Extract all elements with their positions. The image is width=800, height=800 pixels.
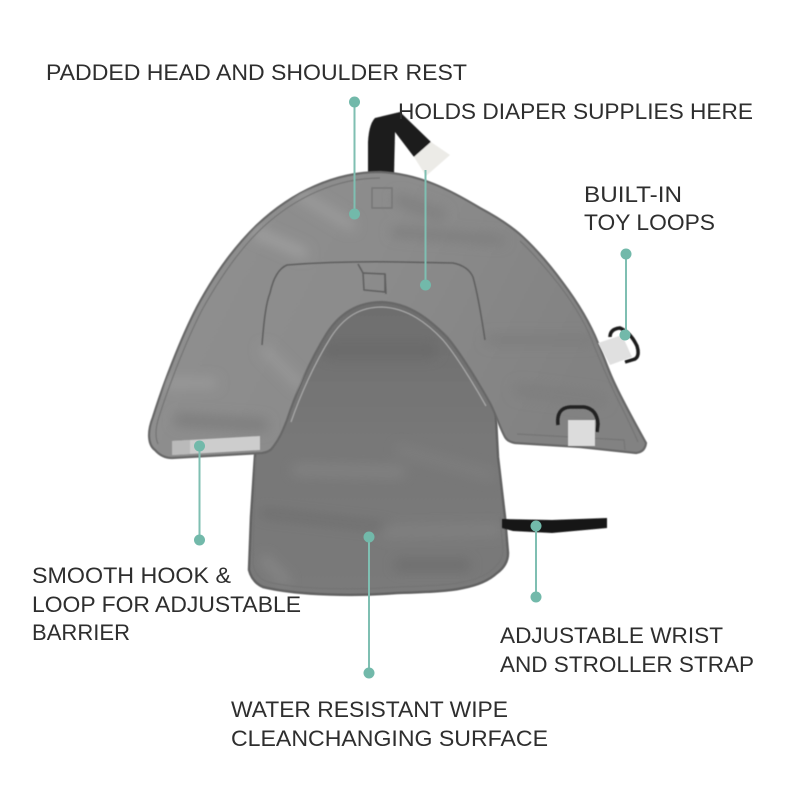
callout line: diaper supplies [420,170,431,290]
callout line: hook and loop [194,440,205,546]
lower pad [249,280,508,595]
label: adjustable wrist and stroller strap: ADJUSTABLE WRIST [500,623,723,648]
stitched compartment [262,188,485,345]
label: holds diaper supplies here: HOLDS DIAPER SUPPLIES HERE [398,99,753,124]
callout line: wrist strap [530,520,542,602]
label: smooth hook and loop: LOOP FOR ADJUSTABLE [32,592,301,617]
icon: diaper mat [149,112,646,595]
pad fabric folds [277,571,278,572]
label: water resistant wipe clean changing surface: WATER RESISTANT WIPE [231,697,508,722]
label: smooth hook and loop: BARRIER [32,620,130,645]
toy loop upper [598,328,638,365]
wrist strap [502,518,607,533]
label: water resistant wipe clean changing surface: CLEANCHANGING SURFACE [231,726,548,751]
hanging strap [368,112,450,176]
hem stitching [156,178,638,589]
callout line: wipe clean surface [364,532,374,678]
hook and loop strip [172,436,260,455]
label: smooth hook and loop: SMOOTH HOOK & [32,563,231,588]
label: built-in toy loops: TOY LOOPS [584,210,715,235]
outer wing panel [149,172,646,458]
callout line: padded head rest [349,96,360,220]
callout line: toy loops [620,248,632,340]
wing fabric folds [163,189,410,430]
label: adjustable wrist and stroller strap: AND STROLLER STRAP [500,652,754,677]
label: built-in toy loops: BUILT-IN [584,182,682,207]
toy loop lower [558,407,598,446]
label: padded head and shoulder rest: PADDED HEAD AND SHOULDER REST [46,60,467,85]
arch highlight [291,307,486,422]
